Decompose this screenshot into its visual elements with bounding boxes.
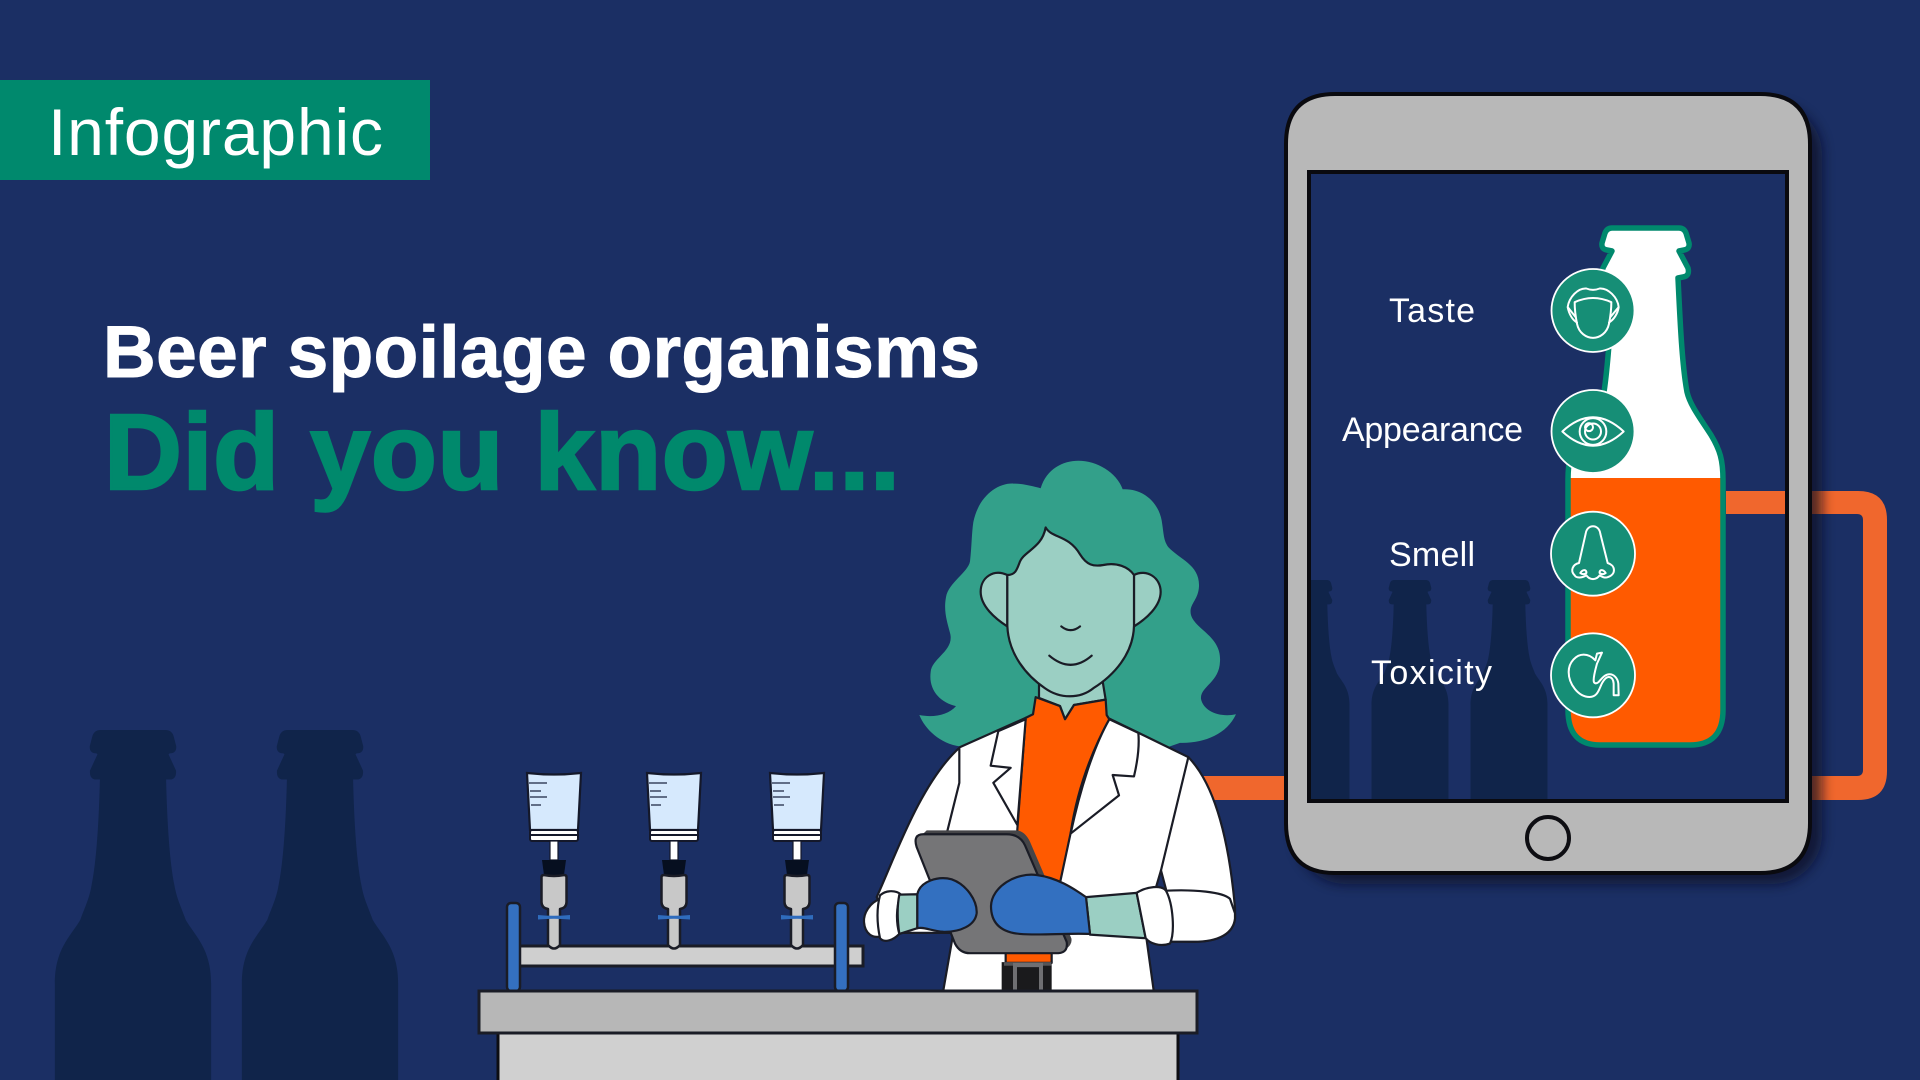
tablet shadow bbox=[1296, 104, 1822, 884]
tablet screen background bottles bbox=[1311, 580, 1548, 799]
rig left post bbox=[507, 903, 520, 991]
beer bottle bbox=[1568, 228, 1723, 745]
handheld tablet back bbox=[917, 830, 1072, 949]
handheld tablet bbox=[916, 834, 1067, 953]
coat arm gap bbox=[1155, 870, 1166, 891]
bottle outline bbox=[1568, 228, 1723, 745]
scientist neck bbox=[1039, 679, 1106, 719]
label: Toxicity: Toxicity bbox=[1371, 654, 1492, 692]
label: Taste: Taste bbox=[1389, 292, 1475, 330]
heading: Did you know: Did you know... bbox=[104, 391, 900, 512]
table base bbox=[498, 1033, 1178, 1080]
filter unit 2 bbox=[647, 773, 701, 948]
scientist orange shirt bbox=[1017, 697, 1109, 883]
connector: orange loop right bbox=[1790, 491, 1887, 800]
icon: nose bbox=[1551, 512, 1635, 596]
heading: Beer spoilage organisms: Beer spoilage organisms bbox=[103, 312, 980, 393]
filtration rig bbox=[507, 773, 863, 991]
tablet bbox=[1272, 94, 1810, 873]
tablet bezel bbox=[1286, 94, 1810, 873]
rig right post bbox=[835, 903, 848, 991]
scientist right ear bbox=[1134, 573, 1161, 626]
connector: orange bar left bbox=[1195, 776, 1295, 800]
coat lapels bbox=[991, 719, 1139, 834]
rig manifold bar bbox=[515, 946, 863, 966]
label: Smell: Smell bbox=[1389, 536, 1475, 574]
shirt lower panel and belt bbox=[1002, 951, 1052, 1001]
scientist left ear bbox=[981, 573, 1007, 626]
coat seams bbox=[947, 749, 1188, 870]
filter unit 1 bbox=[527, 773, 581, 948]
background bottles left bbox=[55, 730, 398, 1080]
badge: Infographic: Infographic bbox=[48, 95, 383, 169]
icon: tongue bbox=[1552, 269, 1634, 352]
table top bbox=[479, 991, 1197, 1033]
lab table bbox=[479, 991, 1197, 1080]
icon: eye bbox=[1552, 390, 1634, 473]
viewer-left arm bbox=[864, 878, 977, 941]
scientist lab coat bbox=[877, 718, 1235, 1000]
viewer-right arm bbox=[991, 875, 1235, 945]
bottle beer liquid bbox=[1568, 470, 1723, 745]
scientist bbox=[864, 461, 1236, 1001]
badge: Infographic bbox=[0, 80, 430, 180]
icon: stomach bbox=[1551, 633, 1635, 717]
scientist face bbox=[1007, 527, 1134, 696]
label: Appearance: Appearance bbox=[1342, 411, 1523, 449]
filter unit 3 bbox=[770, 773, 824, 948]
tablet home button bbox=[1527, 817, 1569, 859]
tablet screen bbox=[1305, 168, 1791, 805]
tablet screen orange bar bbox=[1726, 491, 1792, 514]
scientist hair bbox=[919, 461, 1236, 761]
